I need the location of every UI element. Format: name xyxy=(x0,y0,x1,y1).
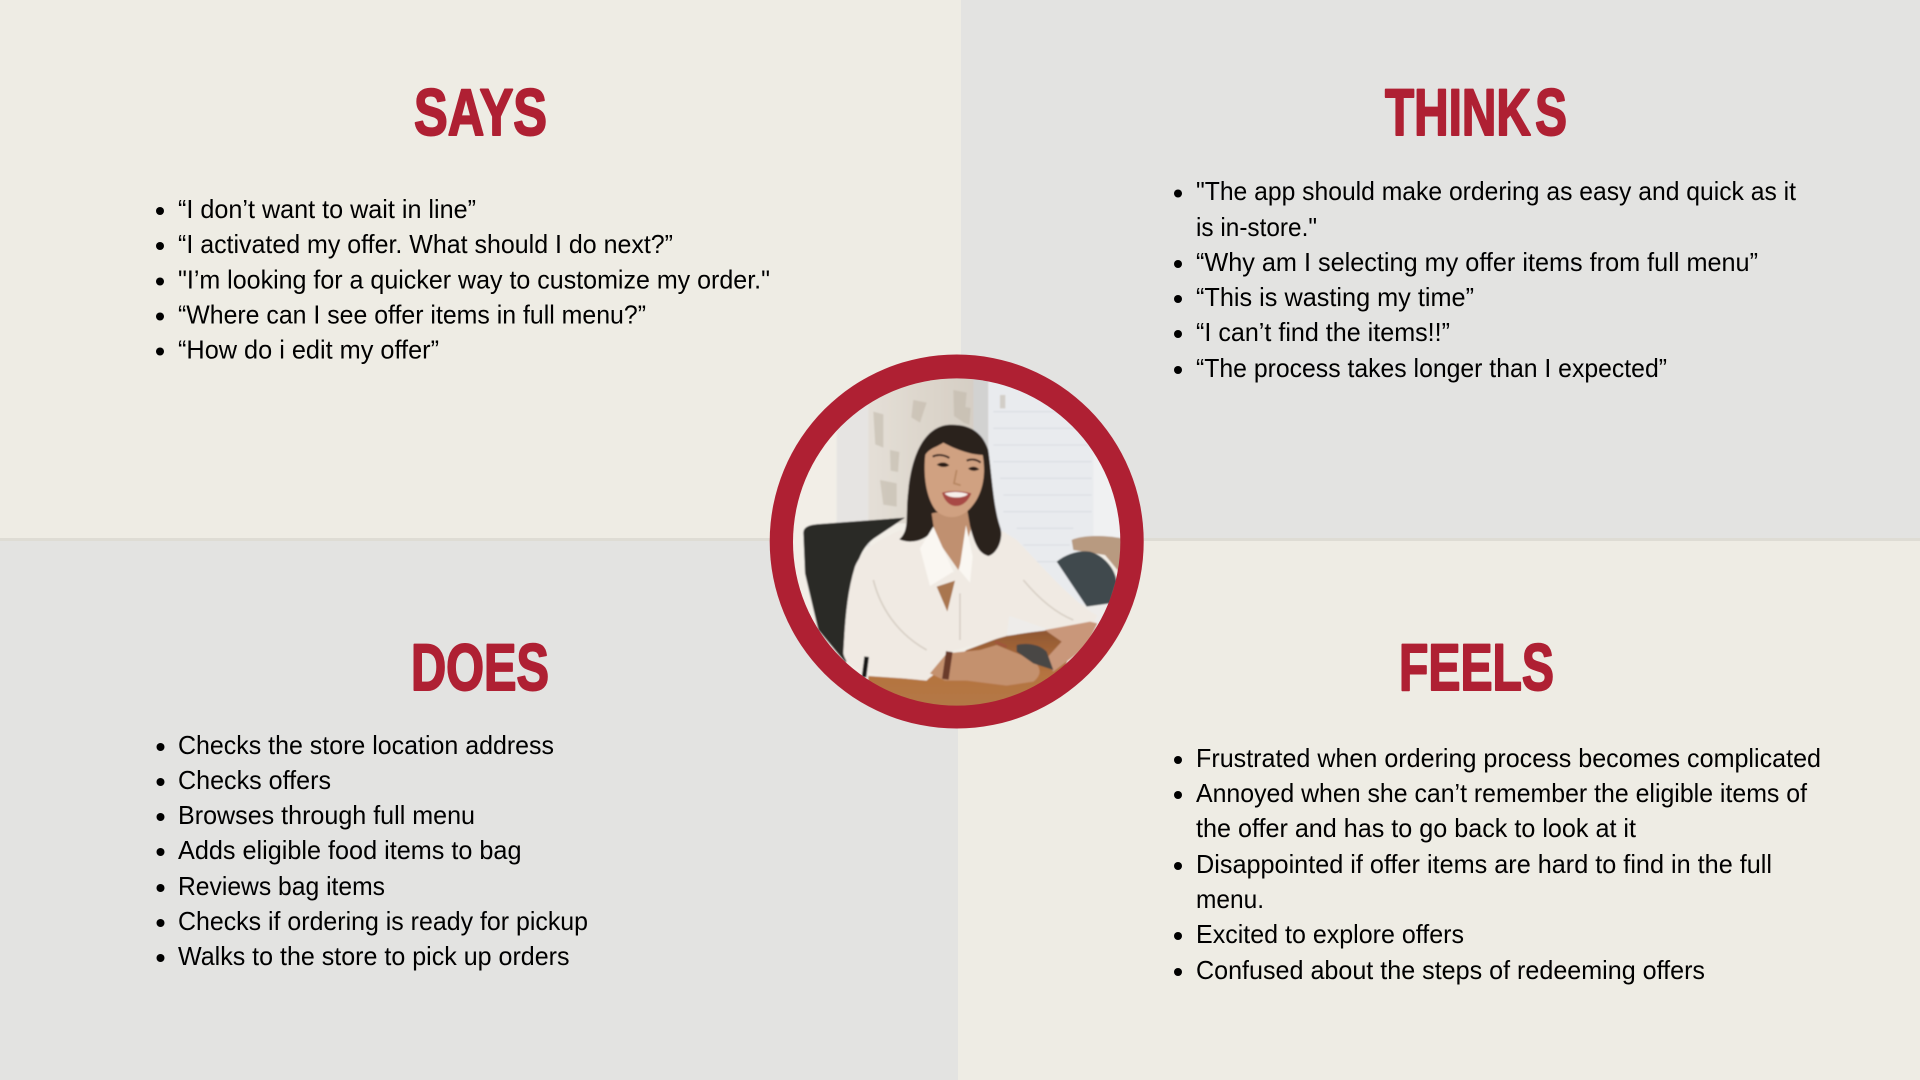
heading: feels: FEELS xyxy=(1399,630,1554,704)
photo: woman at desk xyxy=(790,373,1123,717)
list: does: Walks to the store to pick up orders xyxy=(178,941,570,971)
list: thinks: “I can’t find the items!!” xyxy=(1196,317,1450,347)
list: thinks: “The process takes longer than I expected” xyxy=(1196,353,1667,383)
list: thinks: is in-store." xyxy=(1196,212,1317,242)
list: does xyxy=(156,730,588,971)
heading: says: SAYS xyxy=(414,75,547,149)
portrait with red ring xyxy=(770,354,1144,728)
heading: thinks: THINKS xyxy=(1385,75,1567,149)
list: does: Reviews bag items xyxy=(178,871,385,901)
list: says: “I don’t want to wait in line” xyxy=(178,194,476,224)
list: says: "I’m looking for a quicker way to customize my order." xyxy=(178,264,770,294)
list: feels xyxy=(1174,743,1821,985)
list: feels: Confused about the steps of redeeming offers xyxy=(1196,955,1705,985)
list: feels: Annoyed when she can’t remember the eligible items of xyxy=(1196,778,1808,808)
list: does: Checks offers xyxy=(178,765,331,795)
list: thinks: "The app should make ordering as easy and quick as it xyxy=(1196,176,1797,206)
list: thinks: “This is wasting my time” xyxy=(1196,282,1474,312)
list: thinks xyxy=(1174,176,1797,383)
panel: does xyxy=(0,540,958,1080)
list: says: “How do i edit my offer” xyxy=(178,334,439,364)
panel: says xyxy=(0,0,961,540)
list: says xyxy=(156,194,770,364)
list: does: Browses through full menu xyxy=(178,800,475,830)
panel: thinks xyxy=(961,0,1920,540)
list: does: Checks the store location address xyxy=(178,730,554,760)
list: thinks: “Why am I selecting my offer items from full menu” xyxy=(1196,247,1758,277)
list: says: “I activated my offer. What should I do next?” xyxy=(178,229,673,259)
list: feels: Frustrated when ordering process becomes complicated xyxy=(1196,743,1821,773)
list: feels: the offer and has to go back to look at it xyxy=(1196,813,1637,843)
panel: feels xyxy=(958,540,1920,1080)
list: says: “Where can I see offer items in full menu?” xyxy=(178,300,646,330)
list: feels: menu. xyxy=(1196,884,1264,914)
list: feels: Disappointed if offer items are hard to find in the full xyxy=(1196,849,1772,879)
ring xyxy=(770,354,1144,728)
list: does: Checks if ordering is ready for pickup xyxy=(178,906,588,936)
heading: does: DOES xyxy=(411,630,549,704)
list: does: Adds eligible food items to bag xyxy=(178,835,522,865)
list: feels: Excited to explore offers xyxy=(1196,919,1464,949)
